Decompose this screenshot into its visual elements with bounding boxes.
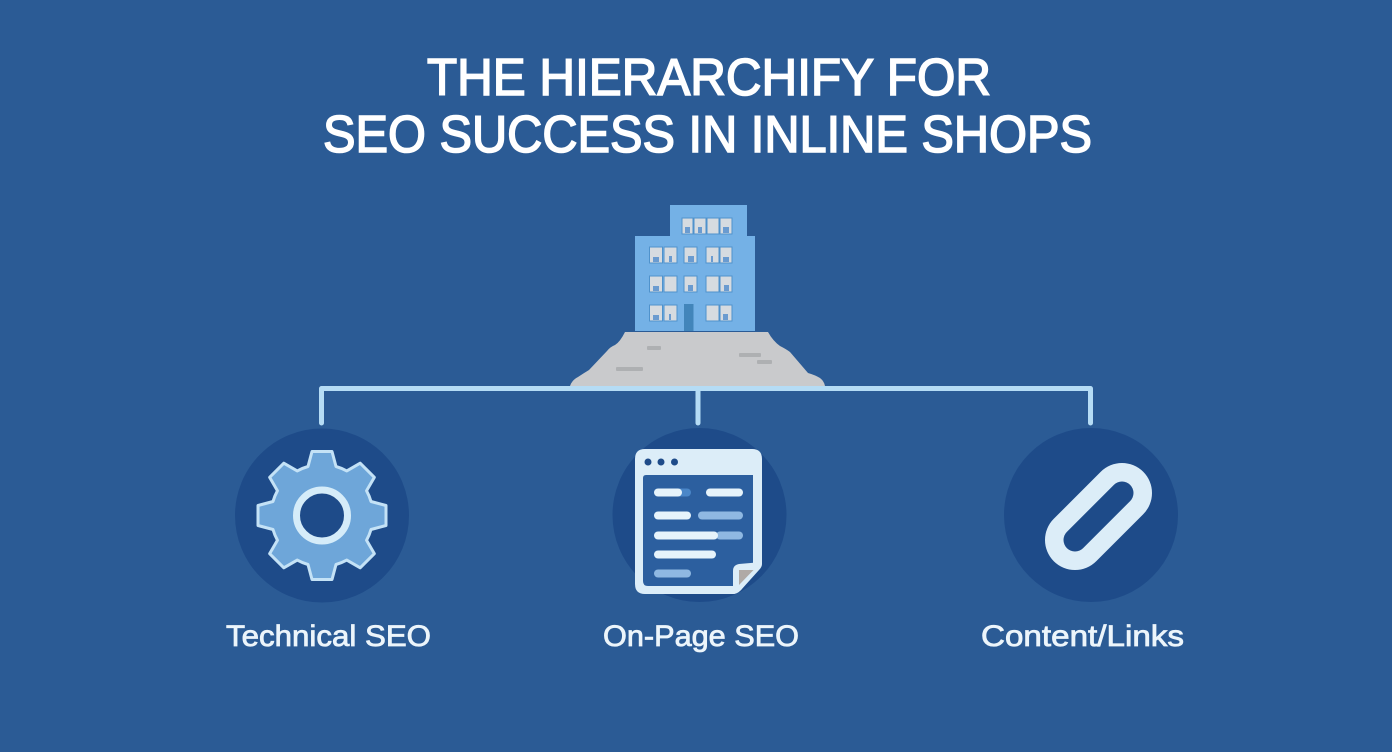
connector lines <box>322 388 1090 423</box>
text lines <box>658 492 739 574</box>
building door <box>684 304 694 331</box>
title: SEO SUCCESS IN INLINE SHOPS <box>323 106 1092 164</box>
hill stones <box>616 346 772 371</box>
page frame <box>635 449 762 594</box>
icon circle <box>1004 428 1178 602</box>
building windows <box>650 218 732 321</box>
label: Technical SEO <box>226 620 431 653</box>
page content area <box>643 475 753 586</box>
window details <box>653 227 729 320</box>
building body <box>635 205 755 331</box>
icon: link <box>1075 493 1122 540</box>
icon: document window <box>635 449 762 594</box>
window dots <box>644 458 678 466</box>
hill <box>570 332 825 386</box>
label: Content/Links <box>981 620 1184 653</box>
page fold <box>733 562 762 594</box>
icon: building on hill <box>570 205 825 386</box>
label: On-Page SEO <box>603 620 799 653</box>
icon circle <box>235 428 409 602</box>
panel: on-page seo <box>603 428 799 653</box>
panel: content/links <box>981 428 1184 653</box>
title <box>323 49 1092 164</box>
icon: gear <box>258 452 386 580</box>
title: THE HIERARCHIFY FOR <box>427 49 991 107</box>
panel: technical seo <box>226 428 431 653</box>
icon circle <box>612 428 786 602</box>
